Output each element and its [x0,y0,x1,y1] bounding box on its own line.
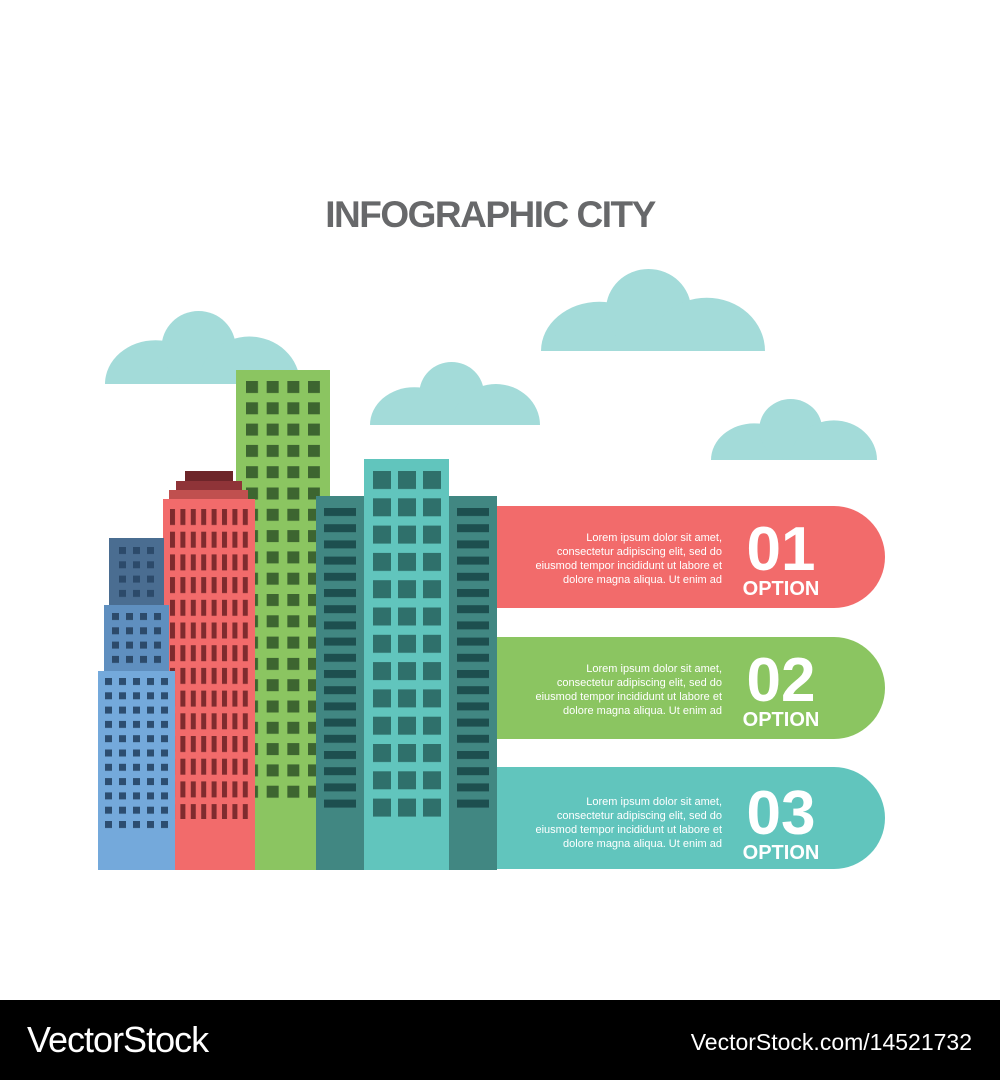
banner: option 03: 03 [747,779,815,848]
banner: option 02: 02 [747,646,815,715]
banner: option 02: consectetur adipiscing elit, sed do [557,677,722,689]
cloud: middle [370,362,540,425]
banner: option 02: dolore magna aliqua. Ut enim ad [563,705,722,717]
banner: option 01: Lorem ipsum dolor sit amet, [586,532,722,544]
title: INFOGRAPHIC CITY [325,194,657,235]
banner: option 03 [497,767,885,869]
banner: option 02 [497,637,885,739]
banner: option 01: 01 [747,515,815,584]
banner: option 02: Lorem ipsum dolor sit amet, [586,663,722,675]
banner: option 03: consectetur adipiscing elit, sed do [557,810,722,822]
building: green tower [236,370,330,870]
footer bar: VectorStock [27,1019,210,1060]
banner: option 01: OPTION [743,578,819,600]
banner: option 01: consectetur adipiscing elit, sed do [557,546,722,558]
cloud: right [711,399,877,460]
footer bar: VectorStock.com/14521732 [691,1029,972,1055]
banner: option 02: eiusmod tempor incididunt ut labore et [536,691,722,703]
banner: option 02: OPTION [743,709,819,731]
building: teal block [316,459,497,870]
banner: option 03: eiusmod tempor incididunt ut labore et [536,824,722,836]
footer bar [0,1000,1000,1080]
banner: option 03: dolore magna aliqua. Ut enim ad [563,838,722,850]
banner: option 03: Lorem ipsum dolor sit amet, [586,796,722,808]
cloud: left [105,311,298,384]
building: red tower [163,471,255,870]
banner: option 03: OPTION [743,842,819,864]
banner: option 01: dolore magna aliqua. Ut enim ad [563,574,722,586]
cloud: top right [541,269,765,351]
building: blue stacked [98,538,175,870]
banner: option 01: eiusmod tempor incididunt ut labore et [536,560,722,572]
banner: option 01 [497,506,885,608]
